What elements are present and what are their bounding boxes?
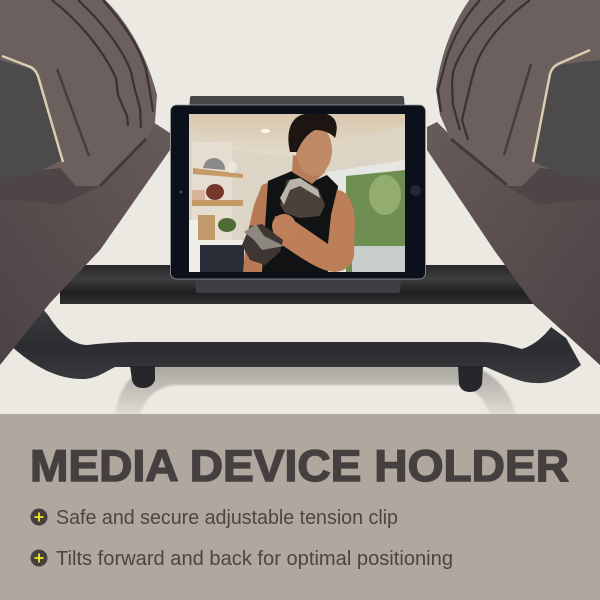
plate grooves left	[52, 0, 153, 128]
upper grip	[280, 178, 320, 205]
ceiling	[189, 114, 405, 158]
tank top	[262, 171, 338, 272]
home button	[410, 185, 421, 196]
face	[296, 124, 332, 176]
window frame	[327, 160, 405, 272]
text band	[0, 414, 600, 600]
lower grip	[244, 224, 284, 250]
white vase	[227, 161, 237, 173]
floor shadow under stand	[115, 366, 516, 414]
counter	[200, 240, 244, 246]
left arm	[243, 180, 275, 272]
tray right	[427, 122, 600, 365]
window	[327, 160, 405, 272]
upper weight head	[280, 178, 325, 218]
tray left	[0, 122, 170, 365]
right dumbbell cradle	[427, 0, 600, 365]
handle block left	[0, 60, 62, 178]
plate slot right	[504, 64, 531, 155]
handle block right	[534, 60, 600, 178]
feature text 2: Tilts forward and back for optimal positioning	[56, 548, 453, 570]
right foot	[458, 366, 483, 392]
potted plant	[218, 218, 236, 232]
ceiling light	[261, 129, 270, 133]
upper shelf	[193, 168, 243, 178]
media device holder	[170, 96, 426, 293]
left dumbbell cradle	[0, 0, 170, 365]
weight plates left	[0, 0, 157, 186]
books	[192, 190, 205, 200]
wall	[189, 114, 405, 272]
tablet body	[170, 105, 426, 279]
neck	[292, 155, 325, 184]
cream strip right	[533, 50, 590, 162]
cabinet	[200, 245, 244, 272]
shelf items	[203, 158, 225, 170]
heading: MEDIA DEVICE HOLDER	[30, 442, 569, 491]
top clip	[189, 96, 405, 110]
base foot left	[0, 168, 100, 205]
garden	[346, 170, 405, 272]
base foot right	[505, 168, 600, 205]
plate slot left	[57, 69, 89, 156]
white column	[189, 220, 200, 272]
feature 1	[30, 507, 398, 529]
sofa	[352, 246, 405, 272]
tube body	[10, 308, 581, 383]
left wall	[192, 142, 232, 242]
bottom clip	[195, 276, 401, 293]
hand	[272, 214, 296, 238]
terracotta vase	[206, 184, 224, 200]
tray slot left	[100, 139, 146, 186]
cream strip left	[2, 56, 63, 162]
lower shelf	[192, 200, 243, 206]
lower stand tube	[10, 308, 581, 392]
tray slot right	[451, 139, 507, 185]
picture frame	[198, 215, 215, 240]
hair	[288, 114, 337, 152]
feature 2	[30, 548, 453, 570]
feature text 1: Safe and secure adjustable tension clip	[56, 507, 398, 529]
left foot	[130, 366, 155, 388]
foliage highlight	[369, 175, 401, 215]
weight plates right	[436, 0, 600, 186]
upper stand bar	[60, 265, 534, 304]
dumbbell	[242, 178, 325, 265]
lower weight head	[242, 224, 283, 265]
front camera	[180, 190, 182, 194]
plus icon 1	[30, 508, 48, 526]
plate grooves right	[438, 0, 530, 140]
plus icon 2	[30, 550, 48, 566]
right arm	[272, 190, 355, 272]
tablet screen photo	[189, 114, 405, 272]
